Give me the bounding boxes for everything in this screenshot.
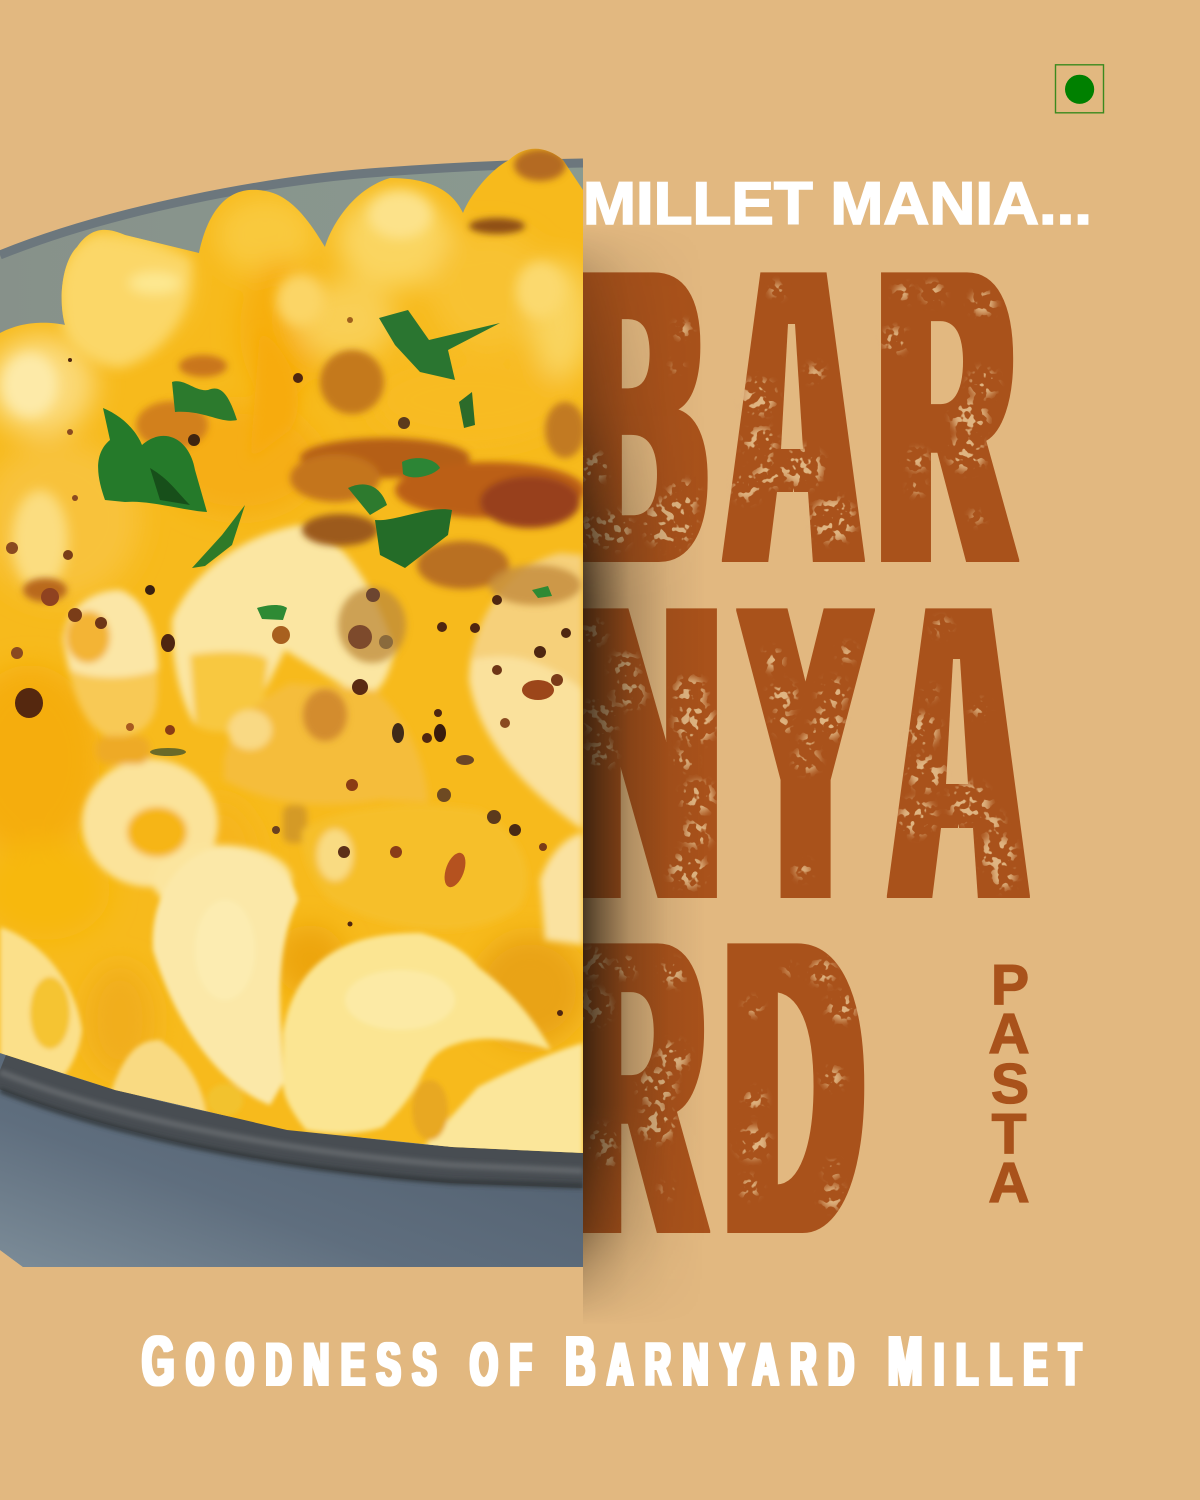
macaroni pieces, middle xyxy=(63,525,583,945)
text: A xyxy=(903,519,1014,986)
eyebrow heading: MILLET MANIA... xyxy=(583,170,1092,237)
macaroni pieces, lower xyxy=(0,850,583,1160)
macaroni pieces, upper xyxy=(2,191,564,590)
vertical word: PASTA: A xyxy=(988,1151,1030,1215)
parsley xyxy=(98,310,552,620)
title line: NYA xyxy=(583,608,1030,898)
pasta xyxy=(0,140,590,1160)
distressed flecks on title letters xyxy=(575,283,1015,1209)
food photo: macaroni in a grey bowl xyxy=(0,140,590,1267)
browned cheese xyxy=(23,149,585,741)
text: R xyxy=(881,183,1011,650)
title line: BAR: A xyxy=(738,183,849,650)
tagline: GOODNESS OF BARNYARD MILLET xyxy=(142,1322,1093,1400)
vertical word: PASTA: P xyxy=(991,953,1029,1017)
vertical word: PASTA: A xyxy=(988,1002,1030,1066)
icon: vegetarian mark xyxy=(1056,65,1104,113)
pepper and toasted specks xyxy=(6,317,571,1016)
vertical word: PASTA: S xyxy=(991,1052,1029,1116)
main title: BARNYARD xyxy=(583,272,1030,1233)
soft colour masses xyxy=(0,192,590,1075)
title line: BAR: B xyxy=(571,183,704,650)
bowl xyxy=(0,161,583,1267)
title line: NYA: N xyxy=(568,519,719,986)
vertical word: PASTA xyxy=(988,953,1030,1215)
title line: RD xyxy=(583,943,864,1233)
title line: RD: R xyxy=(571,854,702,1321)
title line: NYA: Y xyxy=(745,519,866,986)
title line: BAR xyxy=(583,272,1020,562)
main title: BARNYARD: D xyxy=(727,854,860,1321)
vertical word: PASTA: T xyxy=(992,1102,1027,1166)
photo drop shadow xyxy=(583,236,684,1316)
